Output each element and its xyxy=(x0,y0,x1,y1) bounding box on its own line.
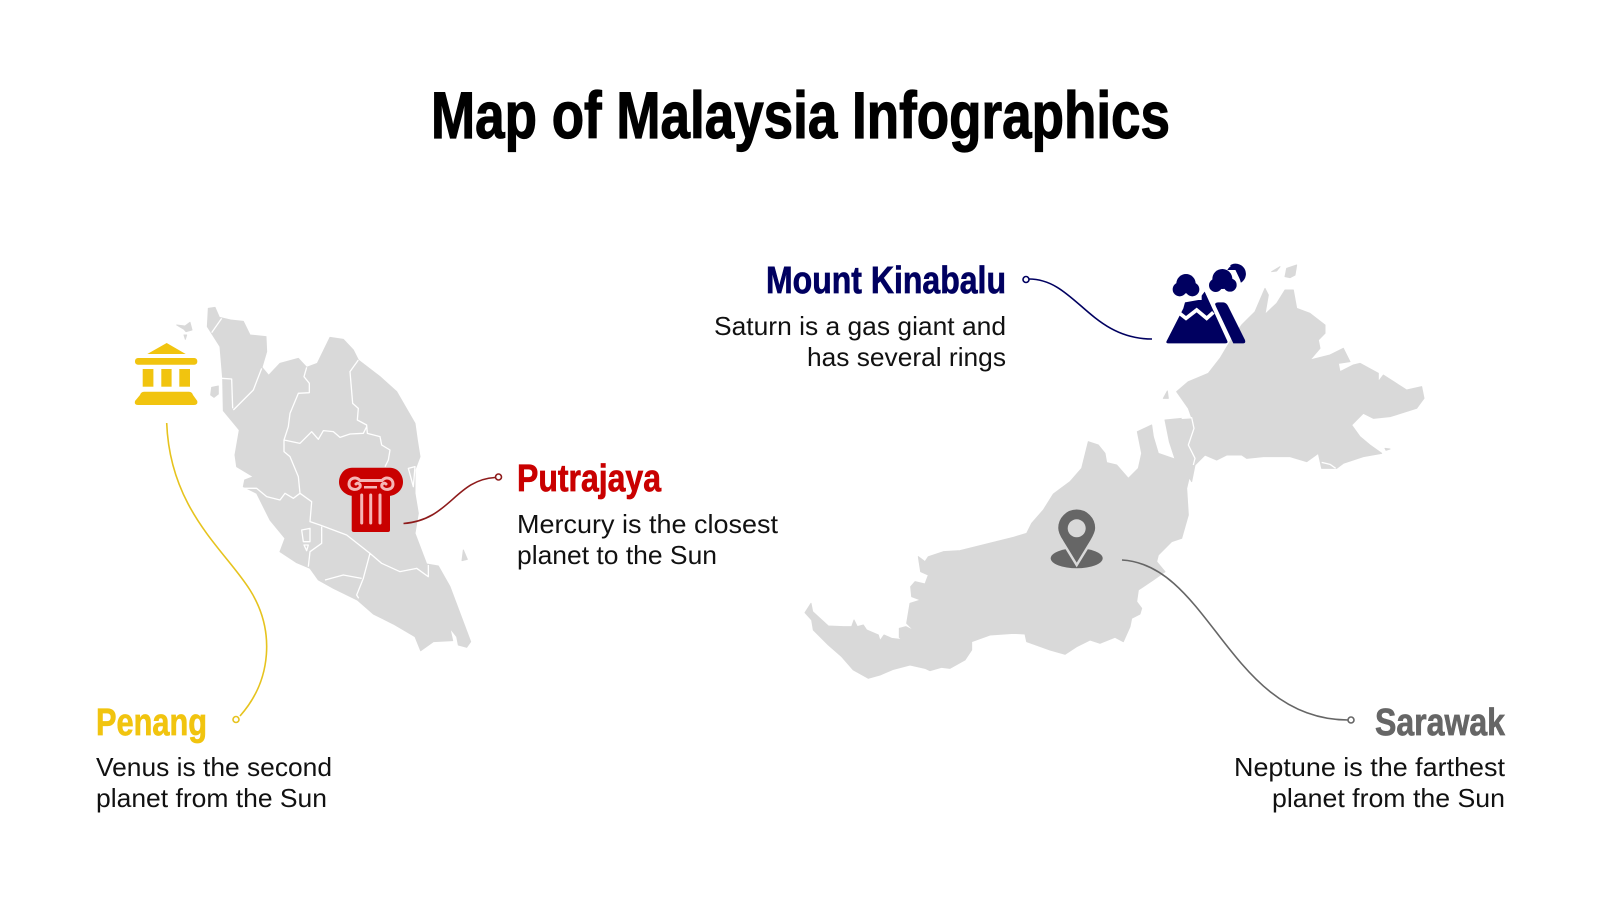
text block: Mount Kinabalu xyxy=(714,260,1006,372)
connector: Penang xyxy=(167,423,267,722)
map: Peninsular Malaysia xyxy=(177,307,471,651)
map: East Malaysia xyxy=(805,265,1424,678)
text block: Penang xyxy=(96,702,332,813)
text block: Putrajaya: Mercury is the closest xyxy=(517,509,779,539)
icon: mountain with clouds xyxy=(1166,264,1246,343)
text block: Putrajaya: planet to the Sun xyxy=(517,540,717,570)
text block: Sarawak: Neptune is the farthest xyxy=(1234,752,1506,782)
text block: Mount Kinabalu: has several rings xyxy=(807,342,1006,372)
Sarawak landmass xyxy=(805,425,1193,678)
text block: Putrajaya: Putrajaya xyxy=(517,458,662,500)
icon: bank xyxy=(135,343,197,405)
text block: Sarawak: Sarawak xyxy=(1375,702,1506,744)
title: Map of Malaysia Infographics xyxy=(431,78,1170,152)
connector: Sarawak xyxy=(1122,560,1354,723)
Sabah landmass xyxy=(1165,288,1424,482)
text block: Sarawak: planet from the Sun xyxy=(1272,783,1505,813)
text block: Sarawak xyxy=(1234,702,1506,813)
icon: ionic column xyxy=(339,468,403,532)
text block: Penang: Penang xyxy=(96,702,207,744)
text block: Mount Kinabalu: Saturn is a gas giant and xyxy=(714,311,1006,341)
text block: Penang: planet from the Sun xyxy=(96,783,327,813)
connector: Mount Kinabalu xyxy=(1023,276,1152,339)
icon: location pin xyxy=(1051,508,1103,568)
state borders xyxy=(212,318,428,598)
islands xyxy=(177,322,467,561)
connector: Putrajaya xyxy=(404,474,502,524)
text block: Putrajaya xyxy=(517,458,779,570)
Sabah islands xyxy=(1163,265,1390,450)
peninsula landmass xyxy=(207,307,471,651)
Sabah Sarawak border xyxy=(1182,304,1336,468)
text block: Penang: Venus is the second xyxy=(96,752,332,782)
text block: Mount Kinabalu: Mount Kinabalu xyxy=(766,260,1006,302)
